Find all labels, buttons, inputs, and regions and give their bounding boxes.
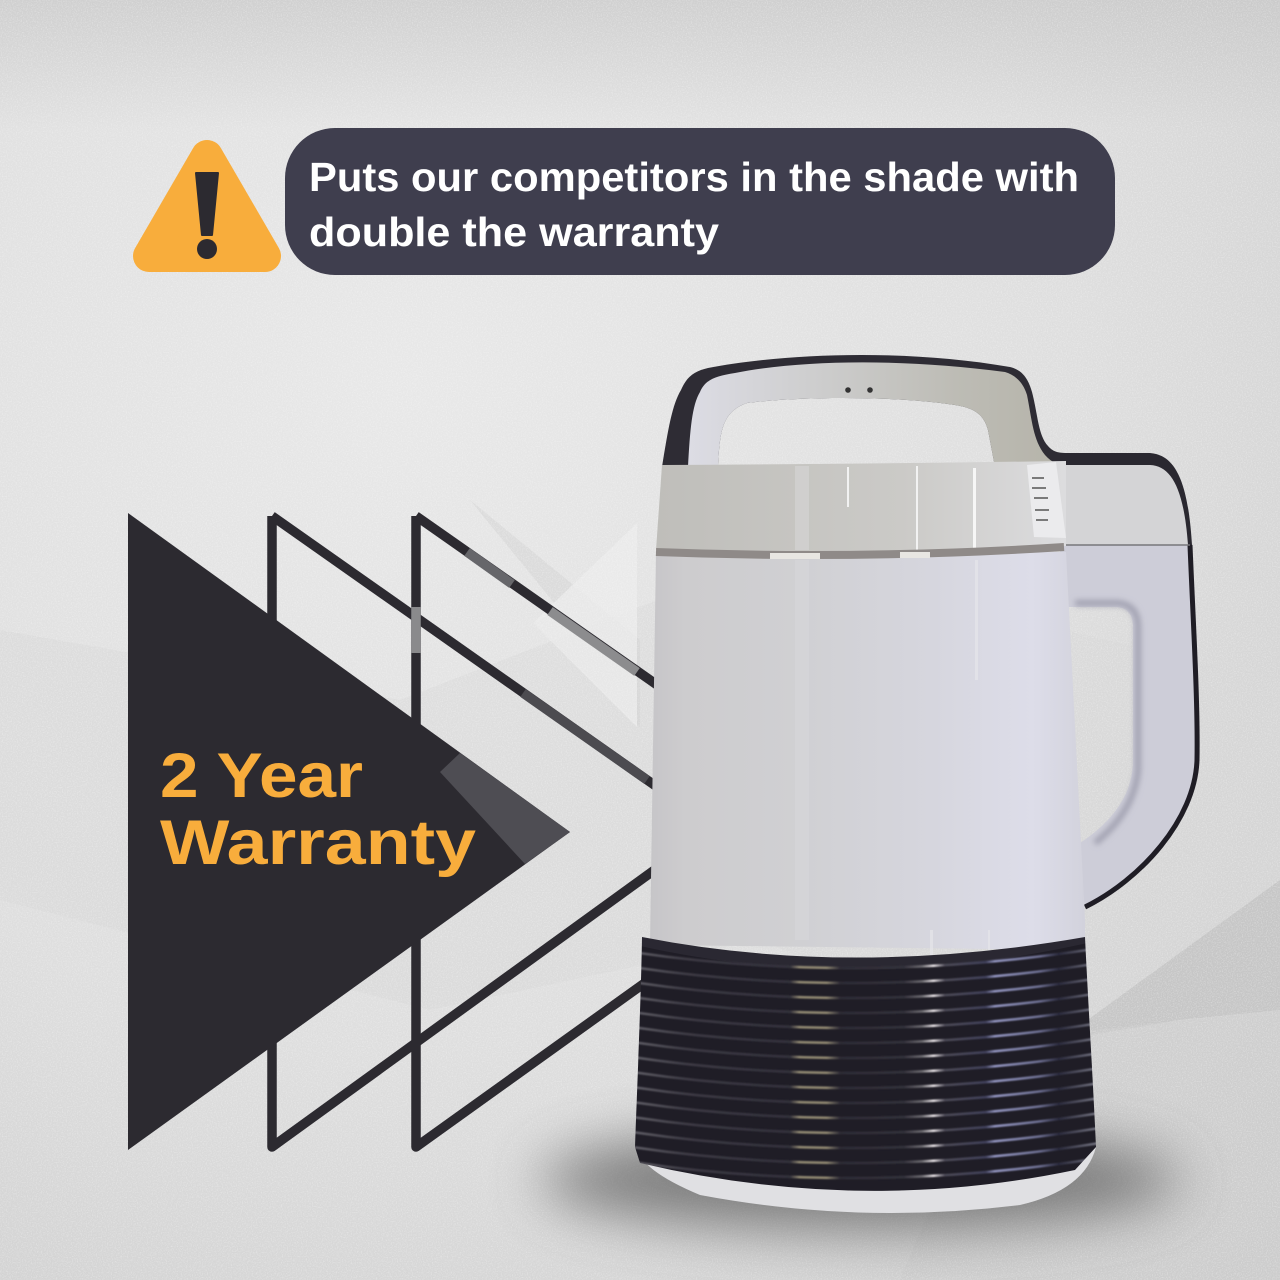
warranty text: Warranty bbox=[160, 808, 476, 878]
warranty text: 2 Year bbox=[160, 741, 363, 811]
ribbed black base bbox=[635, 937, 1096, 1191]
callout text: Puts our competitors in the shade with bbox=[309, 154, 1079, 200]
steel ring bbox=[656, 547, 1064, 555]
warning icon bbox=[149, 156, 265, 259]
top carry handle bbox=[662, 355, 1070, 467]
jug handle bbox=[1060, 545, 1197, 907]
glass strips over lines bbox=[416, 552, 647, 780]
outlined arrow triangles bbox=[272, 516, 660, 1147]
solid triangle with warranty label bbox=[128, 513, 570, 1150]
kettle bbox=[630, 355, 1197, 1215]
lid bbox=[656, 461, 1066, 552]
body highlights bbox=[795, 560, 990, 956]
warning label bbox=[1027, 462, 1066, 538]
body bbox=[650, 552, 1085, 950]
lid back section bbox=[1060, 453, 1192, 545]
callout text: double the warranty bbox=[309, 209, 719, 255]
callout pill bbox=[285, 128, 1115, 275]
kettle shadow bbox=[540, 1130, 1180, 1230]
bottom white foot bbox=[637, 1147, 1096, 1213]
